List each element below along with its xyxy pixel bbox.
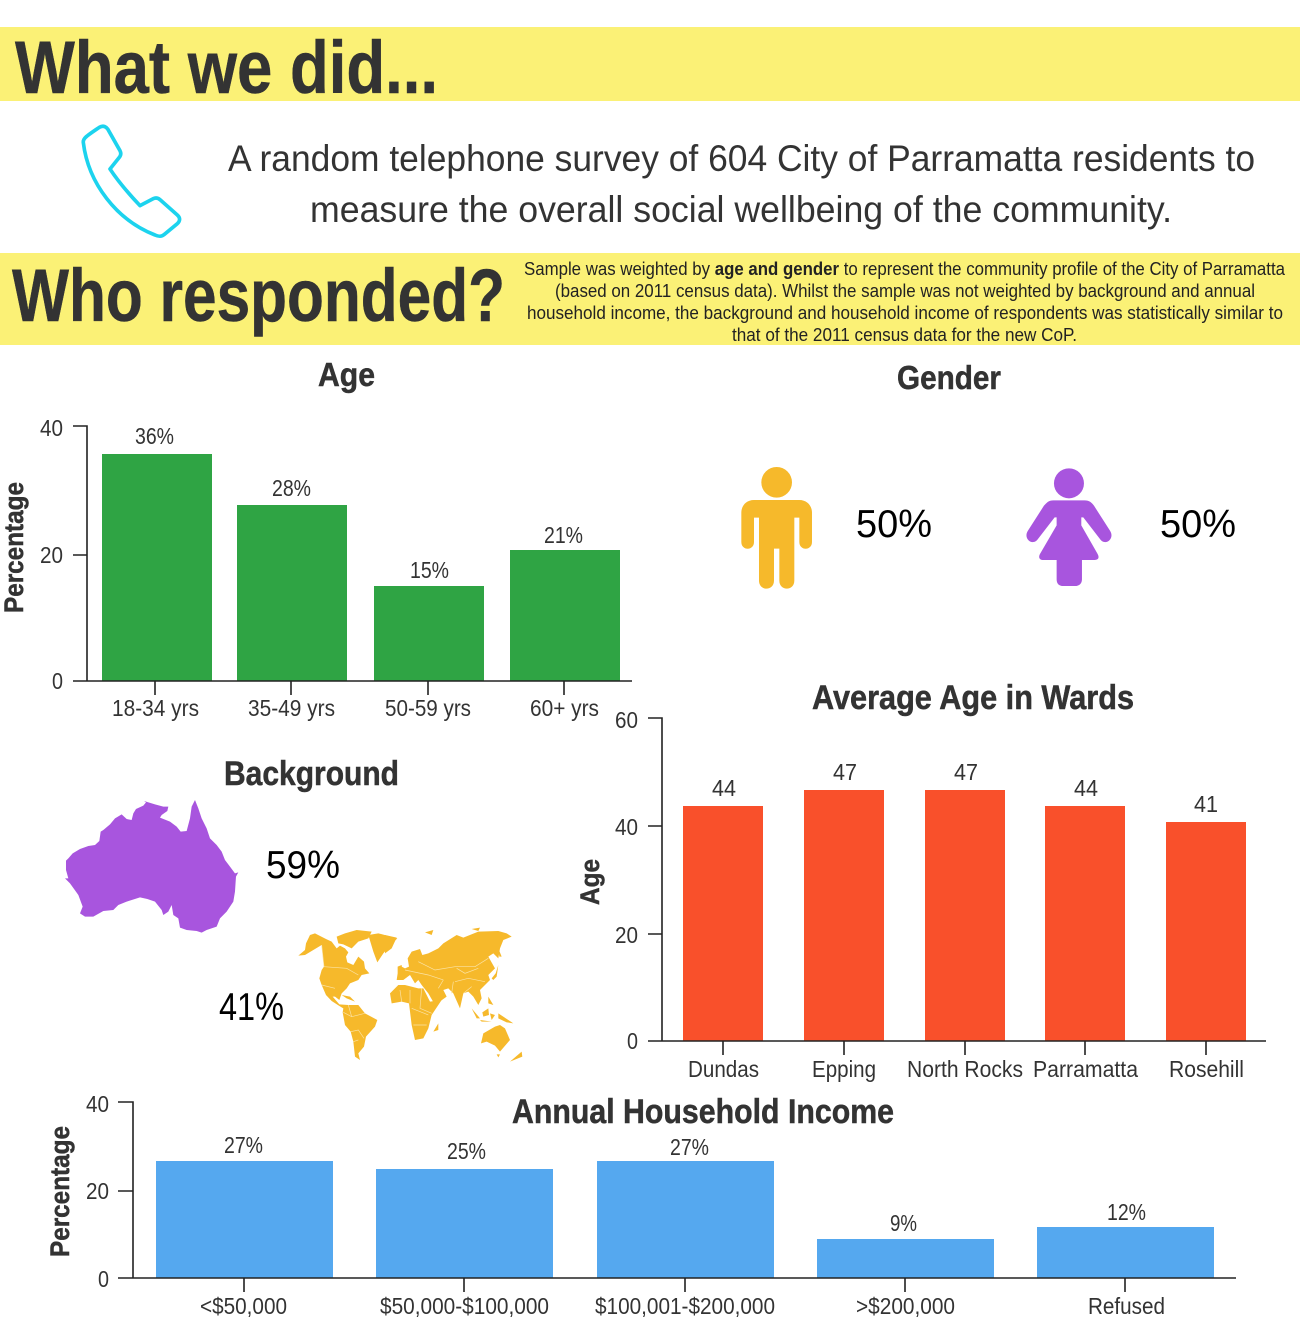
bar chart: annual household income: 12% <box>1107 1199 1146 1225</box>
icon: man <box>741 467 812 589</box>
banner: what we did <box>0 26 1300 109</box>
bar chart: age: 28% <box>272 475 311 501</box>
bar chart: average age in wards: 0 <box>627 1028 638 1054</box>
bar chart: annual household income: 40 <box>86 1091 109 1117</box>
bar chart: annual household income: <$50,000 <box>200 1293 287 1319</box>
bar chart: age: 15% <box>410 557 449 583</box>
icon: woman <box>1026 468 1111 586</box>
bar chart: average age in wards: Age <box>575 859 605 905</box>
label: female percentage: 50% <box>1160 503 1236 546</box>
bar chart: average age in wards: Dundas <box>688 1056 759 1082</box>
heading: annual household income: Annual Household Income <box>512 1093 894 1131</box>
bar chart: average age in wards: North Rocks <box>907 1056 1023 1082</box>
text block: weighting note: that of the 2011 census data for the new CoP. <box>732 324 1077 345</box>
bar chart: age: 60+ yrs <box>530 695 599 721</box>
bar chart: average age in wards: 60 <box>615 707 638 733</box>
bar chart: age: 40 <box>40 415 63 441</box>
bar chart: age: 36% <box>135 423 174 449</box>
bar chart: average age in wards: Epping <box>812 1056 876 1082</box>
bar chart: average age in wards: 44 <box>712 775 736 801</box>
bar chart: age: 18-34 yrs <box>112 695 199 721</box>
bar chart: annual household income: $50,000-$100,000 <box>380 1293 549 1319</box>
banner: who responded <box>0 253 1300 345</box>
bar chart: age: 21% <box>544 522 583 548</box>
label: male percentage: 50% <box>856 503 932 546</box>
text block: weighting note <box>524 258 1286 345</box>
map: world <box>298 928 522 1062</box>
heading: background: Background <box>224 755 399 793</box>
heading: who responded: Who responded? <box>12 254 505 337</box>
bar chart: average age in wards: 20 <box>615 922 638 948</box>
bar chart: age: 50-59 yrs <box>385 695 471 721</box>
bar chart: average age in wards: 47 <box>954 759 978 785</box>
bar chart: annual household income: $100,001-$200,000 <box>595 1293 775 1319</box>
bar chart: age <box>0 415 632 721</box>
text block: survey description <box>228 138 1255 230</box>
bar chart: average age in wards: 40 <box>615 814 638 840</box>
bar chart: annual household income: >$200,000 <box>856 1293 955 1319</box>
bar chart: age: 20 <box>40 542 63 568</box>
bar chart: annual household income <box>45 1091 1236 1319</box>
bar chart: average age in wards <box>575 707 1266 1082</box>
icon: telephone <box>83 126 180 236</box>
label: australia percentage: 59% <box>266 844 340 887</box>
heading: gender: Gender <box>897 359 1001 396</box>
bar chart: average age in wards: 44 <box>1074 775 1098 801</box>
bar chart: age: 0 <box>52 668 63 694</box>
text block: weighting note: (based on 2011 census data). Whilst the sample was not weighted by background and annual <box>555 280 1255 301</box>
label: world percentage: 41% <box>219 986 284 1029</box>
bar chart: annual household income: Refused <box>1088 1293 1165 1319</box>
bar chart: annual household income: 27% <box>224 1132 263 1158</box>
bar chart: average age in wards: Rosehill <box>1169 1056 1244 1082</box>
bar chart: annual household income: Percentage <box>45 1126 75 1257</box>
heading: what we did: What we did... <box>15 26 438 109</box>
map: australia <box>65 800 238 933</box>
text block: survey description: A random telephone survey of 604 City of Parramatta residents to <box>228 138 1255 179</box>
bar chart: average age in wards: Parramatta <box>1033 1056 1138 1082</box>
bar chart: average age in wards: 41 <box>1194 791 1218 817</box>
bar chart: annual household income: 0 <box>98 1266 109 1292</box>
text block: survey description: measure the overall social wellbeing of the community. <box>310 189 1172 230</box>
bar chart: annual household income: 20 <box>86 1178 109 1204</box>
heading: age: Age <box>318 356 375 393</box>
heading: average age in wards: Average Age in Wards <box>812 679 1134 717</box>
bar chart: annual household income: 25% <box>447 1138 486 1164</box>
bar chart: annual household income: 9% <box>890 1210 917 1236</box>
bar chart: annual household income: 27% <box>670 1134 709 1160</box>
bar chart: average age in wards: 47 <box>833 759 857 785</box>
bar chart: age: 35-49 yrs <box>248 695 335 721</box>
